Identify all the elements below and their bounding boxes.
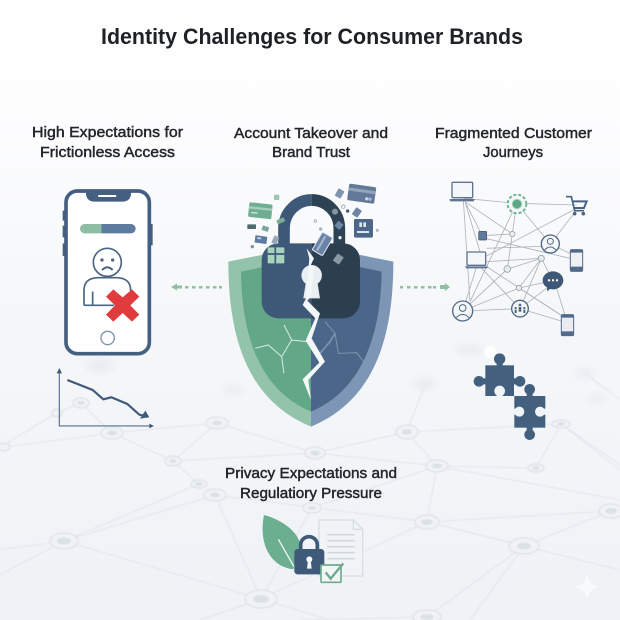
declining line chart [57, 368, 154, 428]
sparkle watermark [575, 575, 599, 599]
keyhole [301, 265, 322, 298]
progress bar [80, 224, 136, 233]
cracked shield with padlock [228, 184, 393, 427]
heading: privacy pressure [225, 465, 397, 502]
heading: fragmented journeys: Fragmented Customer [435, 125, 592, 142]
icon: laptop [465, 252, 488, 268]
padlock shackle [284, 200, 339, 250]
icon: green target [508, 195, 526, 213]
checkbox [321, 563, 343, 582]
phone icon with sad user [63, 191, 153, 354]
left dotted arrow [171, 284, 222, 290]
piece two [514, 384, 546, 440]
heading: account takeover: Account Takeover and [234, 125, 388, 142]
shield [228, 245, 393, 427]
document [319, 520, 363, 576]
piece one [474, 353, 525, 396]
heading: frictionless access [32, 124, 183, 161]
icon: user [541, 235, 559, 253]
icon: people group [512, 300, 528, 317]
network lines [463, 198, 577, 322]
heading: privacy pressure: Privacy Expectations and [225, 465, 397, 482]
icon: phone [570, 250, 583, 271]
heading: privacy pressure: Regulatiory Pressure [240, 485, 382, 502]
icon: laptop [449, 182, 475, 201]
privacy icon: leaf, lock, document, check [263, 515, 363, 582]
background network pattern [0, 345, 620, 620]
title: Identity Challenges for Consumer Brands [101, 24, 523, 49]
main crack [303, 248, 325, 400]
floating cards [247, 184, 378, 265]
heading: account takeover: Brand Trust [272, 144, 351, 161]
customer journey network [449, 182, 587, 336]
puzzle pieces [474, 353, 546, 440]
sad user [84, 248, 131, 305]
heading: frictionless access: High Expectations for [32, 124, 183, 141]
right dotted arrow [400, 283, 450, 291]
icon: cart [566, 197, 587, 215]
padlock [294, 537, 324, 574]
icon: phone [561, 315, 574, 336]
glow behind puzzle [484, 346, 496, 358]
padlock body [262, 243, 360, 318]
red cross [106, 289, 139, 322]
heading: frictionless access: Frictionless Access [40, 144, 175, 161]
network hubs [504, 231, 544, 291]
icon: chat bubble [543, 271, 563, 291]
leaf [263, 515, 300, 569]
heading: account takeover [234, 125, 388, 161]
shield cracks [255, 322, 365, 373]
heading: fragmented journeys [435, 125, 592, 161]
icon: tablet [479, 231, 487, 240]
icon: user [453, 301, 473, 321]
heading: fragmented journeys: Journeys [483, 144, 543, 161]
